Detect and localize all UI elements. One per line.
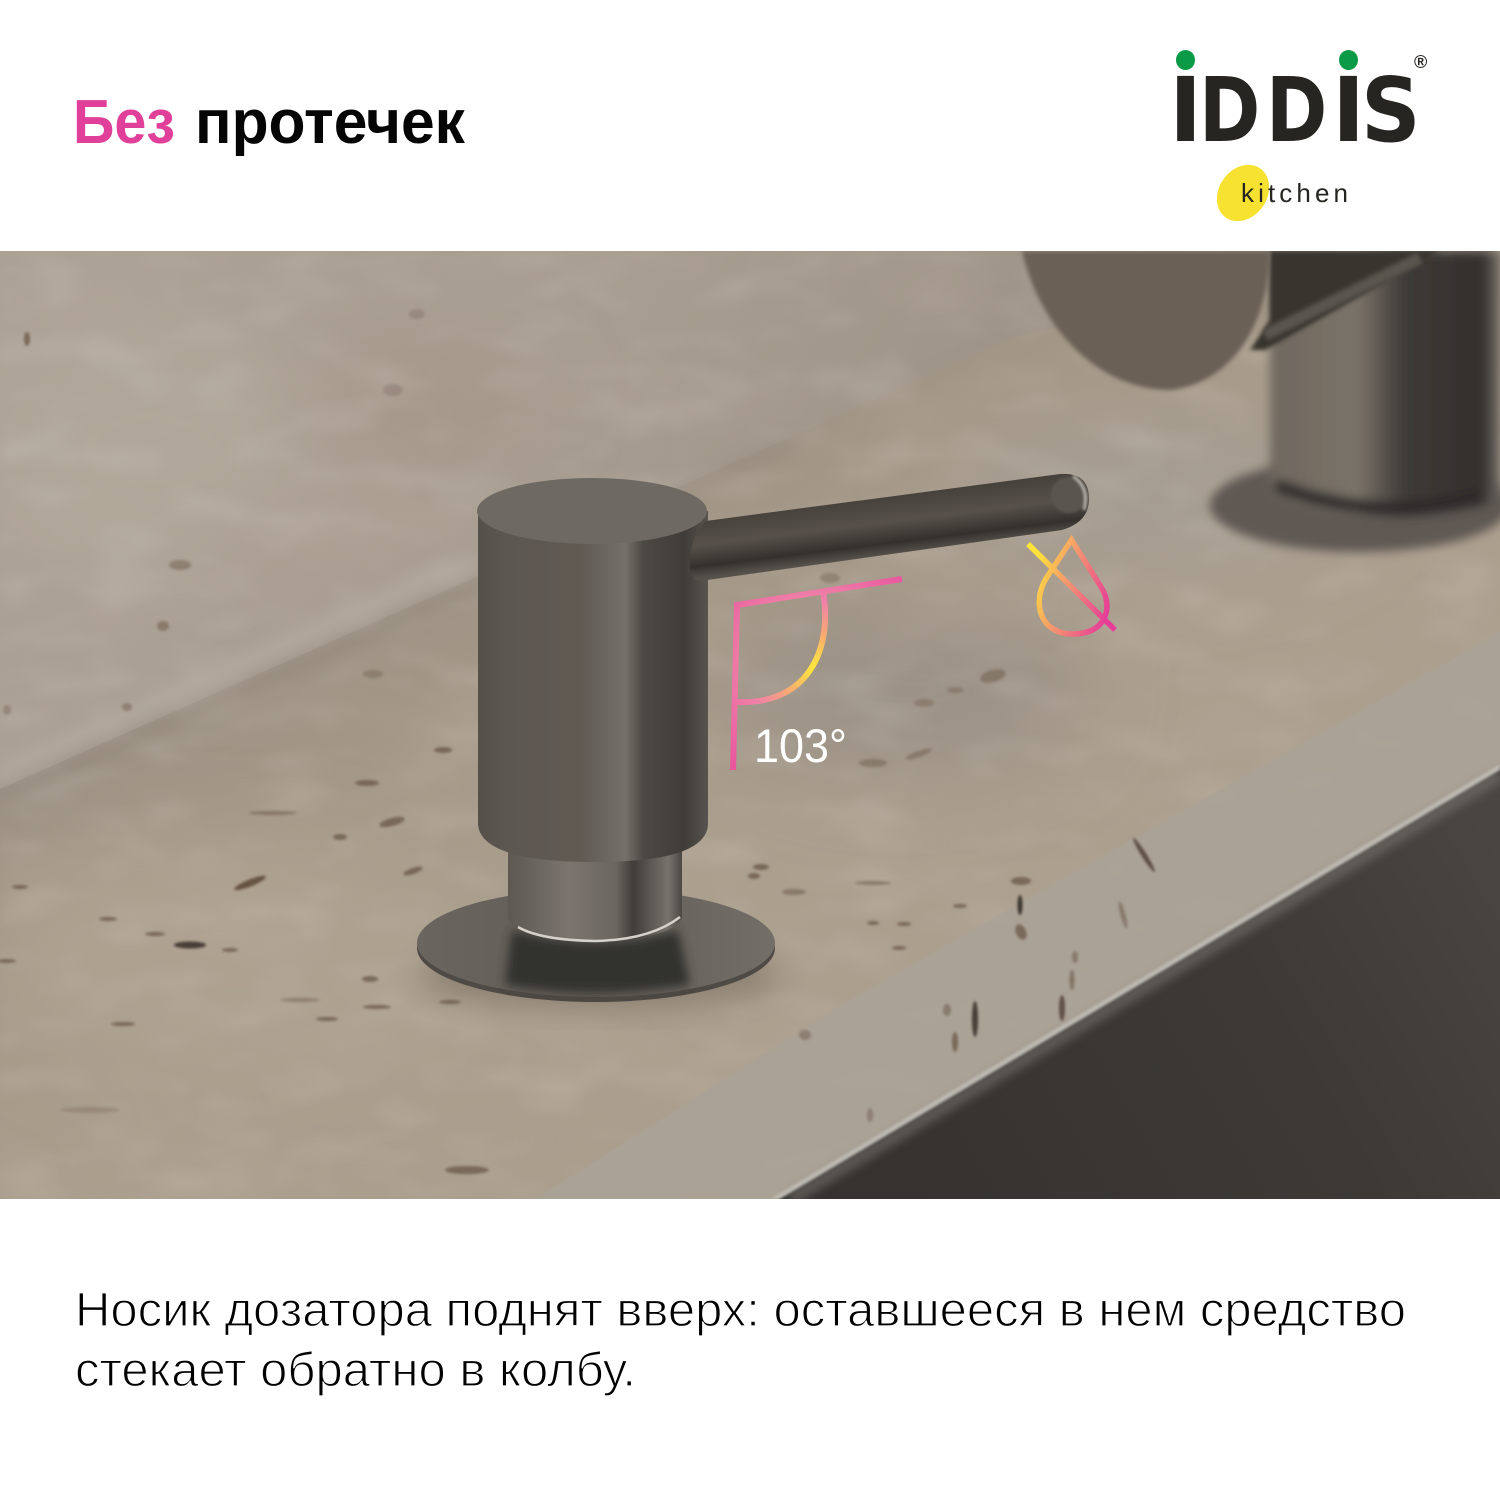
logo wordmark [1169,58,1421,163]
angle lines [733,579,902,770]
title: Без [73,88,175,157]
description text: Носик дозатора поднят вверх: оставшееся в нем средство [75,1284,1406,1337]
description text [75,1284,1406,1397]
dispenser spout [690,474,1089,581]
dispenser base disc [417,889,775,1002]
logo registered mark: ® [1414,52,1427,72]
logo wordmark: D [1199,59,1260,163]
faucet handle arm [1250,251,1440,350]
faucet column [1270,251,1500,516]
logo wordmark: I [1169,58,1202,162]
countertop front edge [852,702,1484,1138]
title: протечек [195,88,466,157]
contact shadow [420,941,780,1009]
dispenser top cap [477,478,707,544]
sink basin [775,767,1500,1199]
logo: IDDIS kitchen [1169,50,1427,231]
description text: стекает обратно в колбу. [75,1344,636,1397]
angle value: 103° [754,719,847,772]
dispenser neck [508,845,682,941]
icon: logo yellow blob [1206,155,1280,231]
stone wall [0,251,1500,789]
logo wordmark: D [1266,59,1327,163]
stone countertop [0,251,1500,1199]
blurred faucet in background [1022,251,1500,552]
logo subtitle: kitchen [1241,178,1352,208]
logo wordmark: S [1361,59,1421,163]
icon: logo green dots [1176,50,1358,70]
spout ball tip [1051,477,1087,513]
photo: dispenser on stone countertop [0,251,1500,1199]
wall and counter junction shading [142,585,422,709]
neck highlight ring [518,917,680,941]
faucet disc [1022,251,1270,390]
title [73,88,466,157]
stone texture [0,251,1500,1199]
dispenser cylinder body [478,511,708,862]
logo wordmark: I [1332,58,1365,162]
angle diagram 103 degrees [733,579,902,770]
travertine speckles [0,309,1157,1174]
icon: crossed drop [1028,540,1115,634]
angle arc [735,592,825,702]
faucet base [1210,458,1500,552]
dispenser [417,474,1089,1009]
sink rim glow [790,775,1500,1199]
sink highlight rim [775,767,1500,1199]
